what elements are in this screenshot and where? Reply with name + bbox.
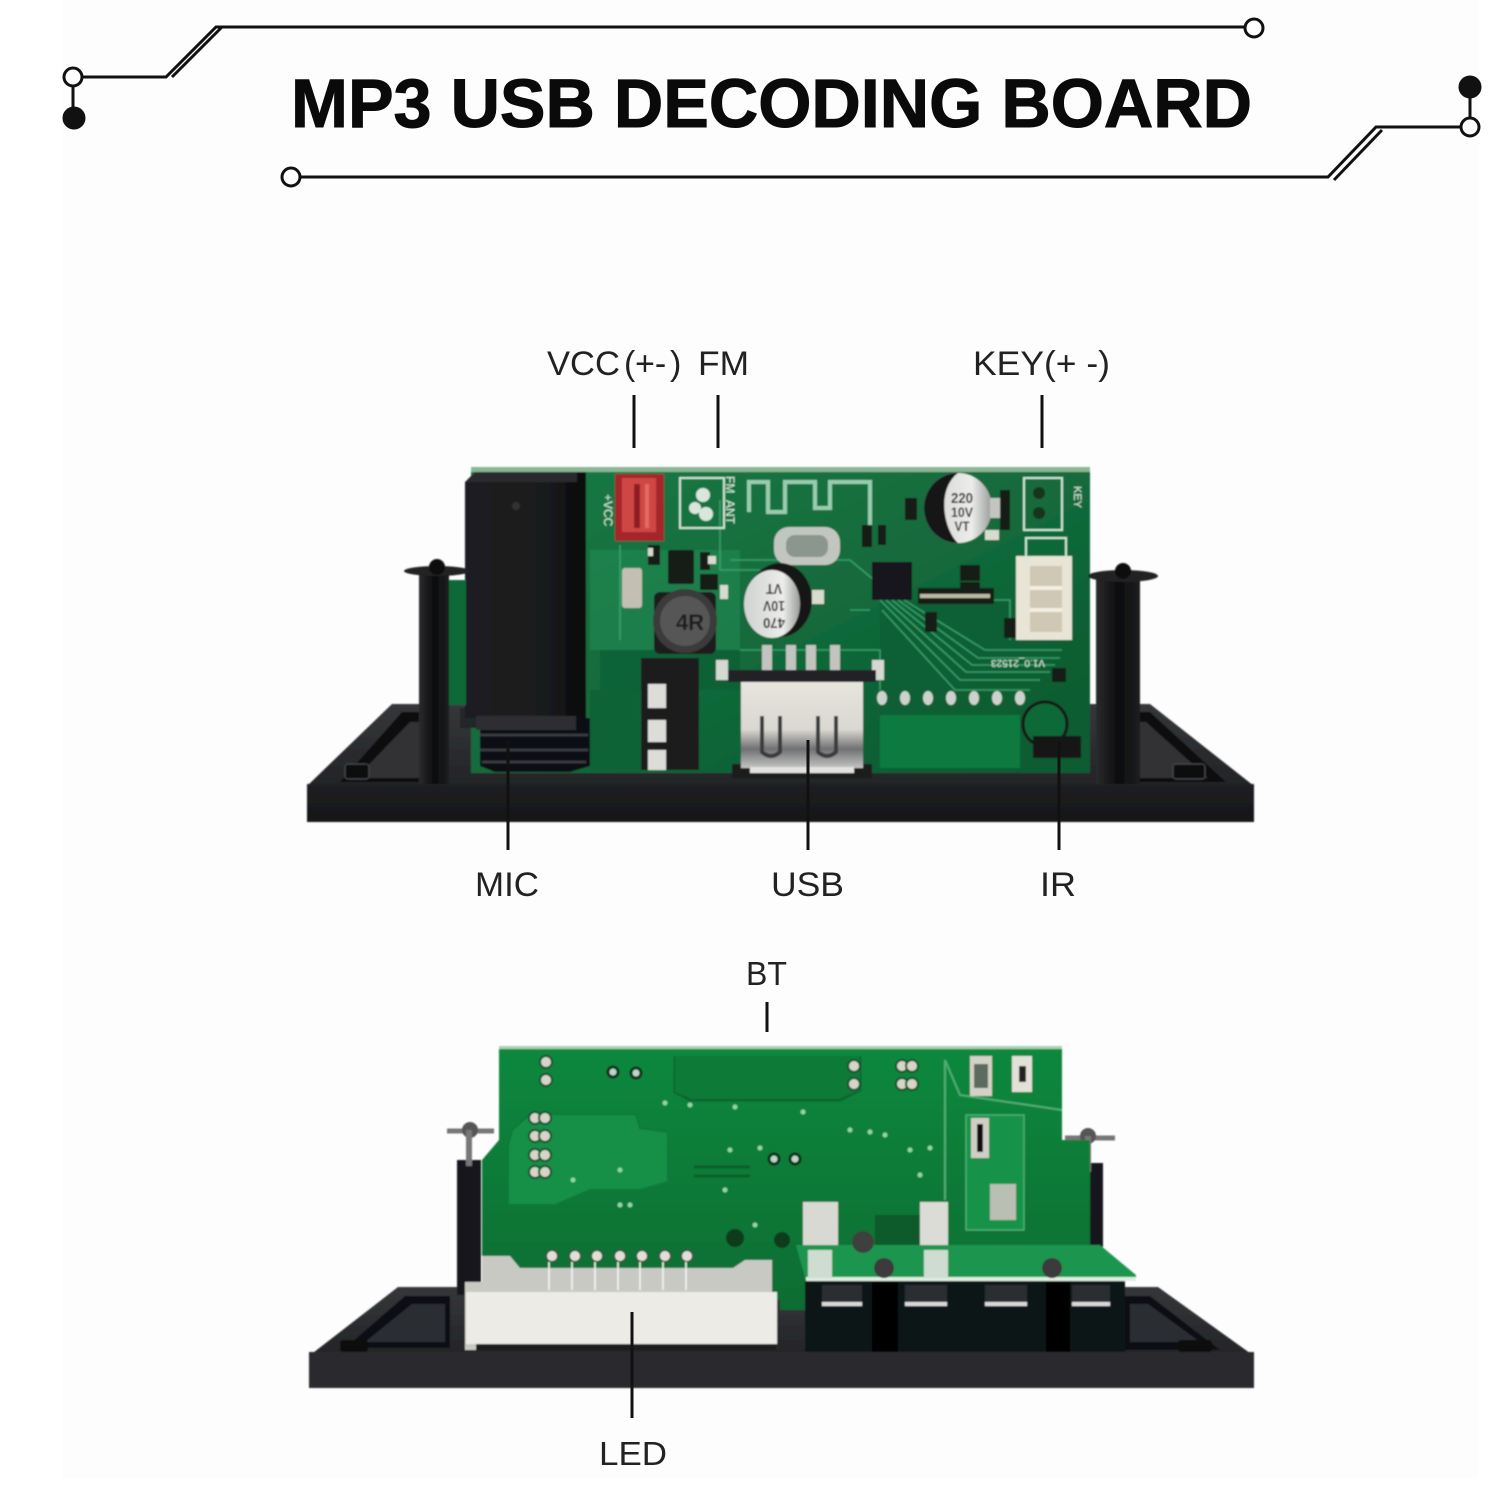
KEY pads: [1024, 478, 1062, 530]
label: LED: LED: [599, 1435, 667, 1472]
FM pads: [680, 478, 724, 528]
label: FM: [698, 345, 749, 448]
USB socket: [732, 764, 872, 778]
mic jack: [480, 718, 590, 772]
BT antenna: [749, 482, 870, 530]
silk FM ANT / +VCC: FM_ANT: [723, 476, 737, 525]
label: BT: BT: [746, 955, 787, 992]
label: KEY(+ -): [973, 345, 1110, 448]
small SMD parts: [648, 490, 1066, 682]
label: KEY(+ -): KEY(+ -): [973, 345, 1110, 383]
photo: front of board: V1.0_21523: [991, 657, 1045, 668]
photo: front of board: 220: [951, 490, 973, 507]
LED connector: [465, 1256, 772, 1350]
header circuit decoration: [64, 19, 1480, 186]
pin row: [877, 691, 1025, 705]
label: VCC(+-): VCC: [547, 345, 620, 383]
traces: [620, 500, 1062, 690]
solder tabs: [803, 1202, 838, 1257]
photo: front of board: VT: [766, 580, 782, 597]
pads left column: [529, 1056, 918, 1178]
label: IR: IR: [1040, 866, 1076, 904]
label: VCC(+-): (: [624, 345, 636, 383]
photo: front of board: KEY: [1071, 486, 1083, 509]
title: MP3 USB DECODING BOARD: [291, 65, 1252, 142]
photo: front of board: [307, 467, 1254, 822]
white 3-pin connector: [1016, 556, 1072, 640]
label: VCC(+-): [547, 345, 681, 448]
PCB: [482, 1046, 1090, 1310]
small audio jack: [641, 658, 699, 770]
QFN chip: [872, 562, 912, 600]
base tray: [307, 704, 1254, 822]
mounting posts: [419, 574, 449, 784]
inductor 4R: [654, 592, 716, 654]
photo: back of board: [309, 1046, 1254, 1388]
crystal: [774, 527, 840, 565]
base tray: [309, 1287, 1254, 1388]
label: MIC: MIC: [475, 866, 539, 904]
photo: front of board: +VCC: [601, 494, 615, 527]
label: BT: [746, 955, 787, 1032]
photo: front of board: 10V: [951, 504, 974, 520]
photo: front of board: 470: [763, 614, 785, 631]
vias: [570, 1100, 932, 1228]
mounting posts: [457, 1160, 481, 1295]
IR receiver: [1023, 702, 1067, 746]
label: USB: USB: [771, 866, 844, 904]
small button PCB: [796, 1245, 1136, 1281]
red VCC connector: [615, 474, 664, 541]
PCB: [471, 467, 1090, 773]
label: VCC(+-): +-: [635, 345, 666, 383]
buttons underside: [805, 1280, 1125, 1352]
capacitor 470uF: [748, 563, 812, 637]
label: VCC(+-): ): [670, 345, 681, 383]
capacitor 220uF: [924, 473, 992, 543]
traces: [694, 1167, 750, 1176]
USB pins: [716, 660, 728, 680]
top right square pads: [970, 1056, 992, 1096]
photo: front of board: VT: [954, 518, 970, 534]
label: FM: FM: [698, 345, 749, 383]
photo: front of board: 10V: [763, 597, 785, 614]
photo: front of board: 4R: [676, 610, 704, 635]
copper regions: [675, 1056, 860, 1100]
